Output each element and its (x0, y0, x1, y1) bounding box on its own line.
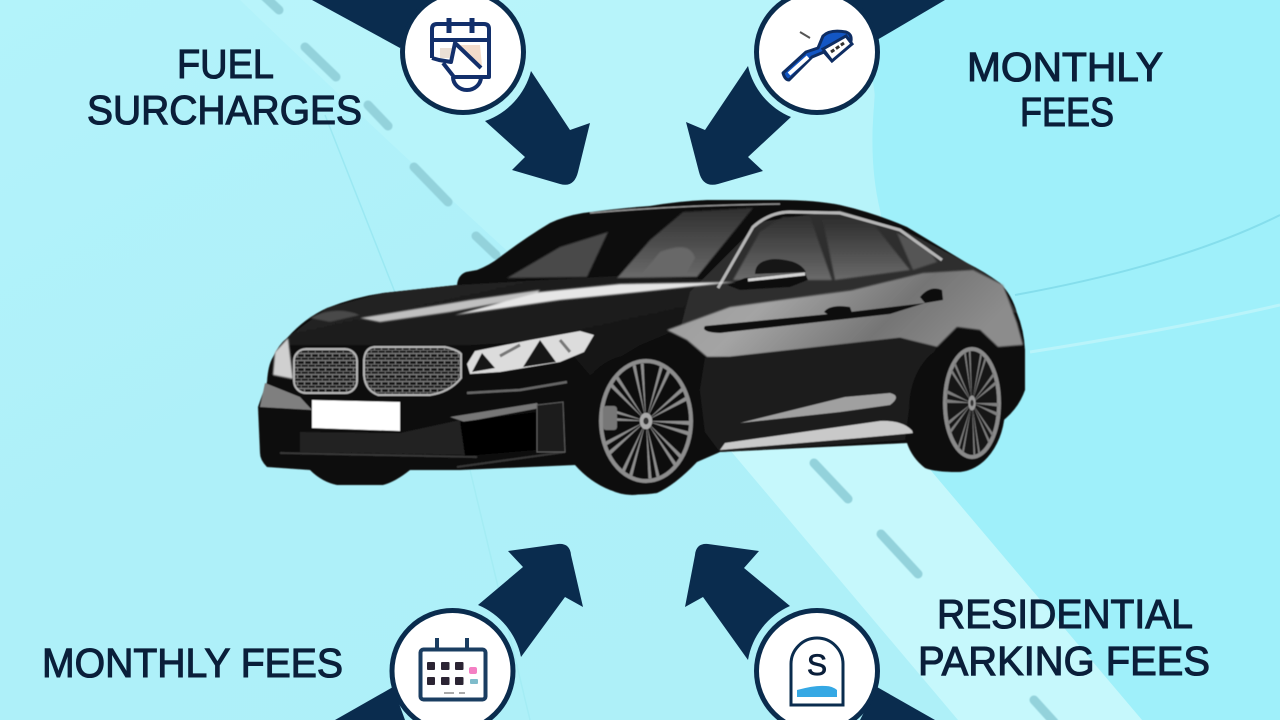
front air intake (460, 412, 537, 456)
label: fuel surcharges: FUEL (177, 41, 274, 87)
grille right (364, 347, 461, 395)
car lower door panel (700, 338, 936, 452)
icon: fuel nozzle (756, 0, 878, 112)
label: fuel surcharges (87, 41, 362, 133)
window chrome trim (718, 212, 942, 288)
bumper crease (467, 382, 567, 393)
bumper lower lines (280, 452, 565, 467)
roof highlight (590, 204, 780, 213)
hood highlights (310, 282, 735, 322)
icon: calendar with folded page (402, 0, 524, 112)
car hood and upper body (273, 276, 720, 375)
car side grey panel (667, 270, 1023, 357)
icon: parking meter sign (756, 610, 878, 720)
front wheel (574, 355, 691, 495)
licence plate (312, 400, 400, 431)
label: monthly fees top right: FEES (1020, 89, 1114, 135)
car (258, 200, 1025, 495)
label: monthly fees top right: MONTHLY (967, 44, 1163, 90)
label: monthly fees bottom left: MONTHLY FEES (42, 640, 343, 686)
left light edge (273, 338, 293, 379)
left bumper grey (260, 383, 312, 410)
windshield glass (507, 208, 753, 278)
rear wheel (909, 344, 1005, 472)
air intake frame (537, 402, 565, 452)
icon: parking meter sign: S (807, 649, 827, 682)
label: fuel surcharges: SURCHARGES (87, 87, 362, 133)
centre lower grille panel (300, 420, 465, 455)
arrow: monthly fees bottom left to car (335, 544, 583, 720)
side windows (733, 217, 937, 280)
bumper highlight (450, 403, 540, 422)
arrow: residential parking fees to car (685, 544, 935, 720)
arrow: fuel surcharges to car (312, 0, 590, 185)
label: residential parking fees (918, 591, 1210, 684)
side mirror (727, 259, 808, 290)
grille left (294, 349, 357, 393)
car side upper band (680, 210, 1017, 330)
road dashes (264, 0, 1054, 720)
label: residential parking fees: RESIDENTIAL (937, 591, 1193, 637)
car body silhouette (258, 200, 1025, 494)
arrow: monthly fees top right to car (686, 0, 945, 185)
label: residential parking fees: PARKING FEES (918, 638, 1210, 684)
icon: monthly calendar (392, 610, 513, 720)
headlight (467, 331, 594, 374)
sill highlights (720, 393, 914, 450)
label: monthly fees top right (967, 44, 1163, 135)
body strip and door handles (704, 289, 943, 333)
